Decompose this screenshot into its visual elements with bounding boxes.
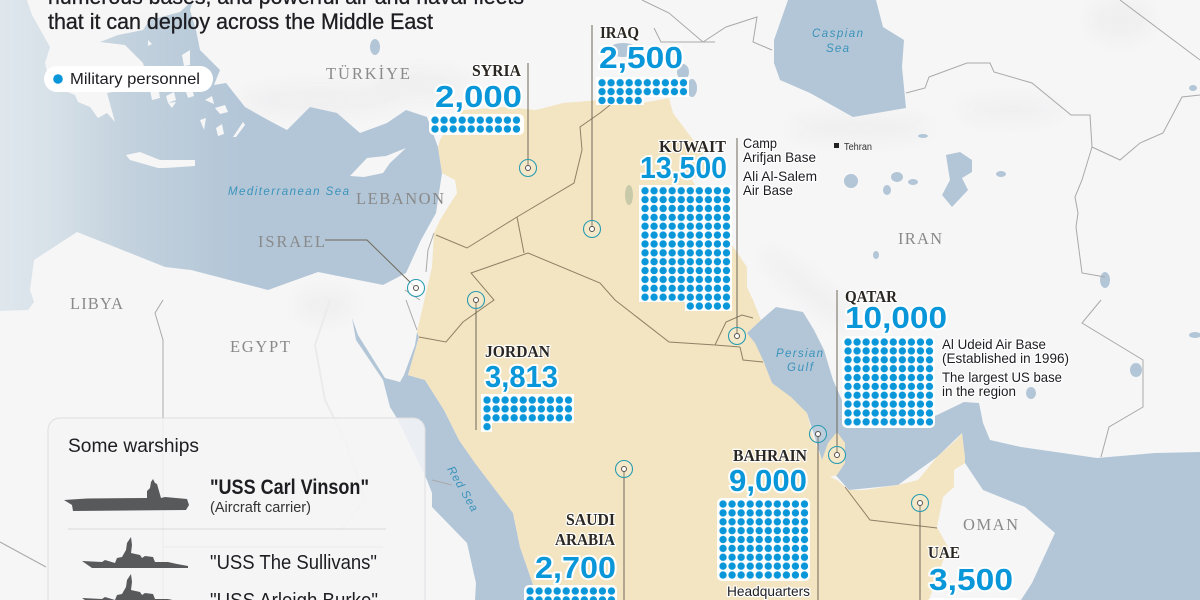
sea name labels: Gulf	[787, 362, 815, 374]
marker: Qatar	[828, 290, 846, 464]
Kuwait base names	[743, 135, 817, 198]
Kuwait base names: Air Base	[743, 182, 793, 198]
inland lakes	[370, 39, 1200, 399]
Qatar base description: The largest US base	[942, 369, 1062, 385]
Bahrain figures: Headquarters	[727, 583, 810, 599]
sea name labels: Mediterranean Sea	[228, 186, 349, 198]
Iraq figures	[596, 23, 689, 105]
country name labels: OMAN	[963, 515, 1018, 534]
Persian Gulf and Gulf of Oman	[747, 307, 1200, 600]
icon: destroyer USS Arleigh Burke	[82, 574, 188, 600]
marker: Syria	[520, 63, 536, 176]
Qatar base description: Al Udeid Air Base	[942, 336, 1046, 352]
country name labels: ISRAEL	[258, 232, 325, 251]
Qatar figures: 10,000	[845, 300, 947, 335]
UAE figures	[927, 543, 1020, 600]
marker: Saudi Arabia	[616, 460, 632, 600]
Caspian Sea	[774, 0, 906, 117]
Kuwait base names: Ali Al-Salem	[743, 168, 817, 184]
country name labels	[70, 64, 1018, 534]
country name labels: LEBANON	[356, 189, 444, 208]
Jordan figures: JORDAN	[485, 342, 551, 361]
marker: Israel	[325, 240, 424, 296]
country name labels: IRAN	[898, 229, 942, 248]
marker: Iraq	[584, 25, 600, 238]
Bahrain figures	[717, 446, 810, 599]
icon: destroyer USS The Sullivans	[82, 537, 188, 568]
icon: Tehran capital: Tehran	[844, 142, 872, 153]
Iraq figures: IRAQ	[600, 23, 639, 42]
marker: Kuwait	[728, 138, 746, 344]
Saudi Arabia figures: SAUDI	[566, 510, 615, 529]
title: that it can deploy across the Middle East	[48, 9, 433, 34]
Kuwait base names: Camp	[743, 135, 777, 151]
sea name labels: Sea	[826, 43, 849, 55]
Syria figures: 2,000	[435, 79, 522, 114]
Kuwait figures	[639, 137, 732, 311]
Bahrain figures: 9,000	[729, 463, 807, 498]
USS Carl Vinson label: "USS Carl Vinson"	[210, 476, 369, 499]
Jordan figures: 3,813	[485, 359, 558, 394]
marker: Bahrain	[810, 426, 826, 600]
Jordan figures	[481, 342, 574, 432]
Qatar base description	[942, 336, 1069, 399]
allied nations land	[408, 98, 965, 600]
Kuwait figures: KUWAIT	[659, 137, 727, 156]
UAE figures: UAE	[928, 543, 960, 562]
Saudi Arabia figures: ARABIA	[555, 530, 616, 549]
Qatar figures: QATAR	[845, 287, 898, 306]
Qatar base description: in the region	[942, 383, 1016, 399]
Nile river	[315, 300, 365, 530]
USS Carl Vinson label: (Aircraft carrier)	[210, 499, 311, 516]
country name labels: LIBYA	[70, 294, 123, 313]
USS Carl Vinson label	[210, 476, 369, 516]
Saudi Arabia figures: 2,700	[535, 550, 616, 585]
Qatar figures	[842, 287, 947, 428]
land relief shading	[140, 0, 1150, 336]
USS The Sullivans label: "USS The Sullivans"	[210, 552, 377, 574]
sea name labels: Persian	[776, 348, 823, 360]
legend: military personnel	[44, 66, 213, 92]
UAE figures: 3,500	[929, 562, 1013, 597]
icon: aircraft carrier	[64, 479, 189, 511]
marker: UAE	[912, 494, 928, 600]
Bahrain figures: BAHRAIN	[733, 446, 808, 465]
Mediterranean and Aegean Sea	[0, 0, 442, 311]
panel: some warships	[48, 418, 425, 600]
Red Sea	[352, 318, 545, 600]
Syria figures: SYRIA	[472, 61, 522, 80]
legend: military personnel: Military personnel	[70, 71, 200, 88]
Syria figures	[429, 61, 524, 135]
islands	[126, 40, 406, 177]
Qatar base description: (Established in 1996)	[942, 350, 1069, 366]
sea name labels: Red Sea	[444, 464, 480, 514]
country name labels: TÜRKİYE	[326, 64, 410, 83]
sea name labels	[228, 28, 863, 514]
icon: Tehran capital	[834, 142, 872, 153]
Iraq figures: 2,500	[599, 40, 683, 75]
Kuwait base names: Arifjan Base	[743, 149, 816, 165]
sea name labels: Caspian	[812, 28, 863, 40]
Kuwait figures: 13,500	[640, 150, 727, 185]
marker: Jordan	[468, 292, 484, 430]
allied country borders	[419, 105, 937, 528]
Saudi Arabia figures	[524, 510, 617, 600]
panel heading: Some warships	[68, 436, 199, 457]
country name labels: EGYPT	[230, 337, 290, 356]
title	[48, 0, 524, 34]
